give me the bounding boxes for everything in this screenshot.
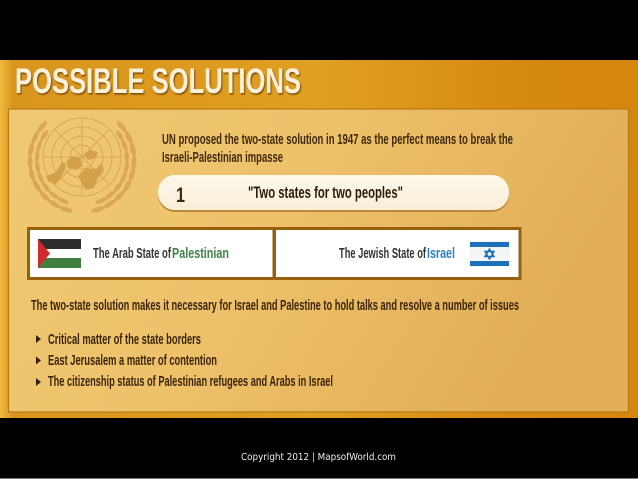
copyright: Copyright 2012 | MapsofWorld.com <box>241 452 396 463</box>
pill: two states for two peoples: 1 <box>176 184 185 207</box>
issue 2: East Jerusalem a matter of contention <box>48 352 217 369</box>
icon: emblem olive wreath <box>27 120 137 214</box>
icon: bullet arrow 1 <box>36 335 41 343</box>
icon: Palestinian flag <box>38 239 81 268</box>
top black band <box>0 0 638 60</box>
issue 1: Critical matter of the state borders <box>48 331 201 348</box>
Arab state label: The Arab State of <box>93 245 172 262</box>
title: POSSIBLE SOLUTIONS <box>15 62 301 101</box>
icon: emblem landmasses <box>46 150 104 190</box>
Israel label: Israel <box>427 245 455 262</box>
state comparison box <box>28 228 520 279</box>
icon: bullet arrow 2 <box>36 356 41 364</box>
issue 3: The citizenship status of Palestinian refugees and Arabs in Israel <box>48 373 333 390</box>
Jewish state label: The Jewish State of <box>339 245 427 262</box>
icon: Israeli flag <box>470 241 510 267</box>
intro text: Israeli-Palestinian impasse <box>162 149 283 166</box>
bottom black band <box>0 418 638 478</box>
bottom grey line <box>0 478 638 479</box>
pill: two states for two peoples <box>158 175 509 212</box>
main panel <box>8 109 628 412</box>
gold slide background <box>0 60 638 418</box>
intro text <box>162 131 513 166</box>
issues list <box>36 331 333 390</box>
icon: UN emblem <box>27 118 137 214</box>
icon: bullet arrow 3 <box>36 378 41 386</box>
Palestinian label: Palestinian <box>172 245 229 262</box>
pill: two states for two peoples: "Two states for two peoples" <box>248 183 403 202</box>
